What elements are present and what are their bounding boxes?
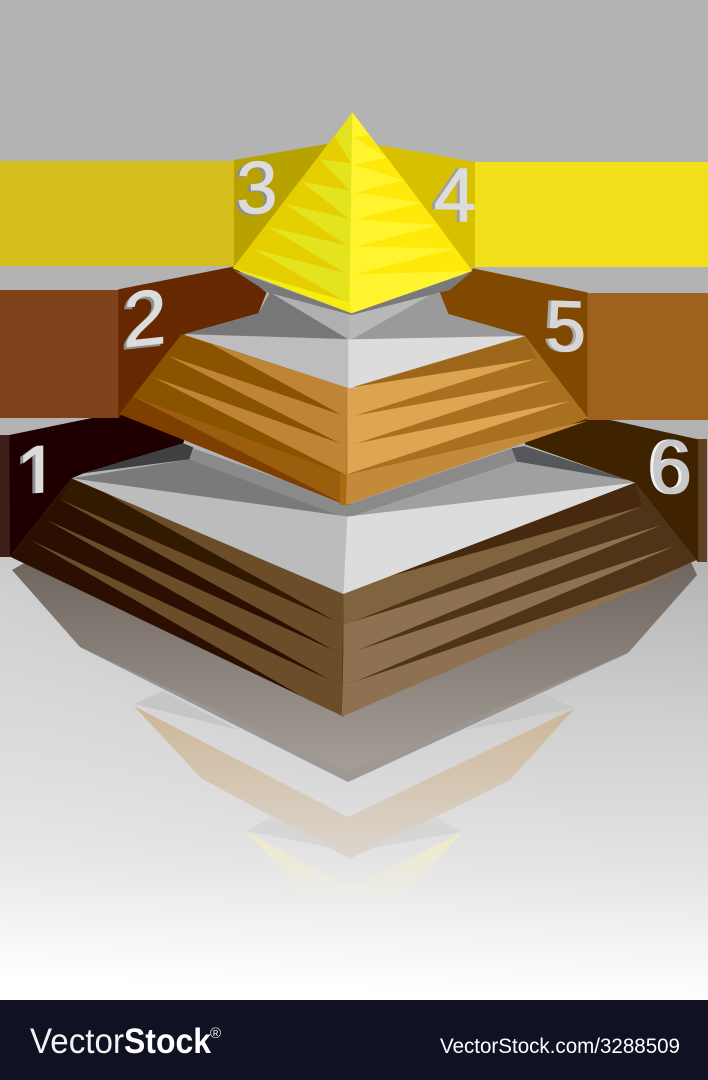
pyramid: left face bbox=[233, 112, 352, 313]
number 6: 6 bbox=[647, 424, 689, 511]
panel 3 bbox=[234, 144, 340, 266]
panel 5 bbox=[439, 268, 587, 420]
footer logo: ® bbox=[210, 1025, 221, 1042]
middle tier bbox=[119, 292, 588, 505]
middle tier: left brown face bbox=[119, 334, 349, 505]
yellow band right bbox=[474, 162, 708, 267]
number 4: 4 bbox=[434, 153, 476, 238]
panel 1 bbox=[9, 413, 187, 557]
number 5: 5 bbox=[543, 286, 583, 368]
number 3: 3 bbox=[236, 145, 278, 230]
bottom tier bbox=[10, 443, 697, 717]
footer logo: Vector bbox=[30, 1022, 124, 1061]
number 6: 6 bbox=[650, 424, 692, 511]
top yellow pyramid bbox=[233, 112, 472, 315]
footer logo: Stock bbox=[124, 1022, 211, 1061]
dark band left bbox=[0, 435, 10, 557]
background: reflective floor bbox=[0, 555, 708, 1000]
pyramid shadow bbox=[233, 270, 472, 315]
dark band right bbox=[698, 439, 707, 562]
footer bar bbox=[0, 1000, 708, 1080]
number 1: 1 bbox=[16, 428, 60, 518]
reflection: middle tier bbox=[134, 691, 574, 859]
brown band right bbox=[587, 293, 708, 420]
number 1 bbox=[20, 446, 44, 494]
brown band left bbox=[0, 290, 119, 418]
background: upper gray wall bbox=[0, 0, 708, 560]
middle tier: right brown face bbox=[346, 336, 588, 505]
bottom tier: gray top, left bbox=[72, 443, 354, 594]
reflection: top tier bbox=[247, 817, 461, 912]
middle tier: center edge bbox=[340, 473, 347, 505]
number 4: 4 bbox=[431, 153, 473, 238]
number 5: 5 bbox=[546, 286, 586, 368]
number 1: 1 bbox=[13, 429, 57, 520]
number 2: 2 bbox=[120, 274, 164, 367]
middle tier: gray top, right bbox=[348, 293, 525, 388]
bottom tier: gray top, right bbox=[343, 446, 635, 594]
yellow band left bbox=[0, 161, 235, 266]
number 3: 3 bbox=[233, 146, 275, 231]
reflection: bottom tier bbox=[12, 560, 697, 782]
pyramid: right face bbox=[349, 112, 472, 313]
footer logo bbox=[30, 1022, 221, 1061]
middle tier: gray top, left bbox=[185, 292, 355, 388]
footer image id: VectorStock.com/3288509 bbox=[440, 1035, 680, 1058]
reflection of the pyramid bbox=[12, 560, 697, 912]
panel 2 bbox=[118, 267, 267, 418]
bottom tier: left brown face bbox=[10, 478, 344, 717]
number 2: 2 bbox=[123, 272, 167, 364]
panel 6 bbox=[525, 417, 698, 563]
bottom tier: right brown face bbox=[342, 483, 697, 717]
panel 4 bbox=[379, 145, 475, 267]
